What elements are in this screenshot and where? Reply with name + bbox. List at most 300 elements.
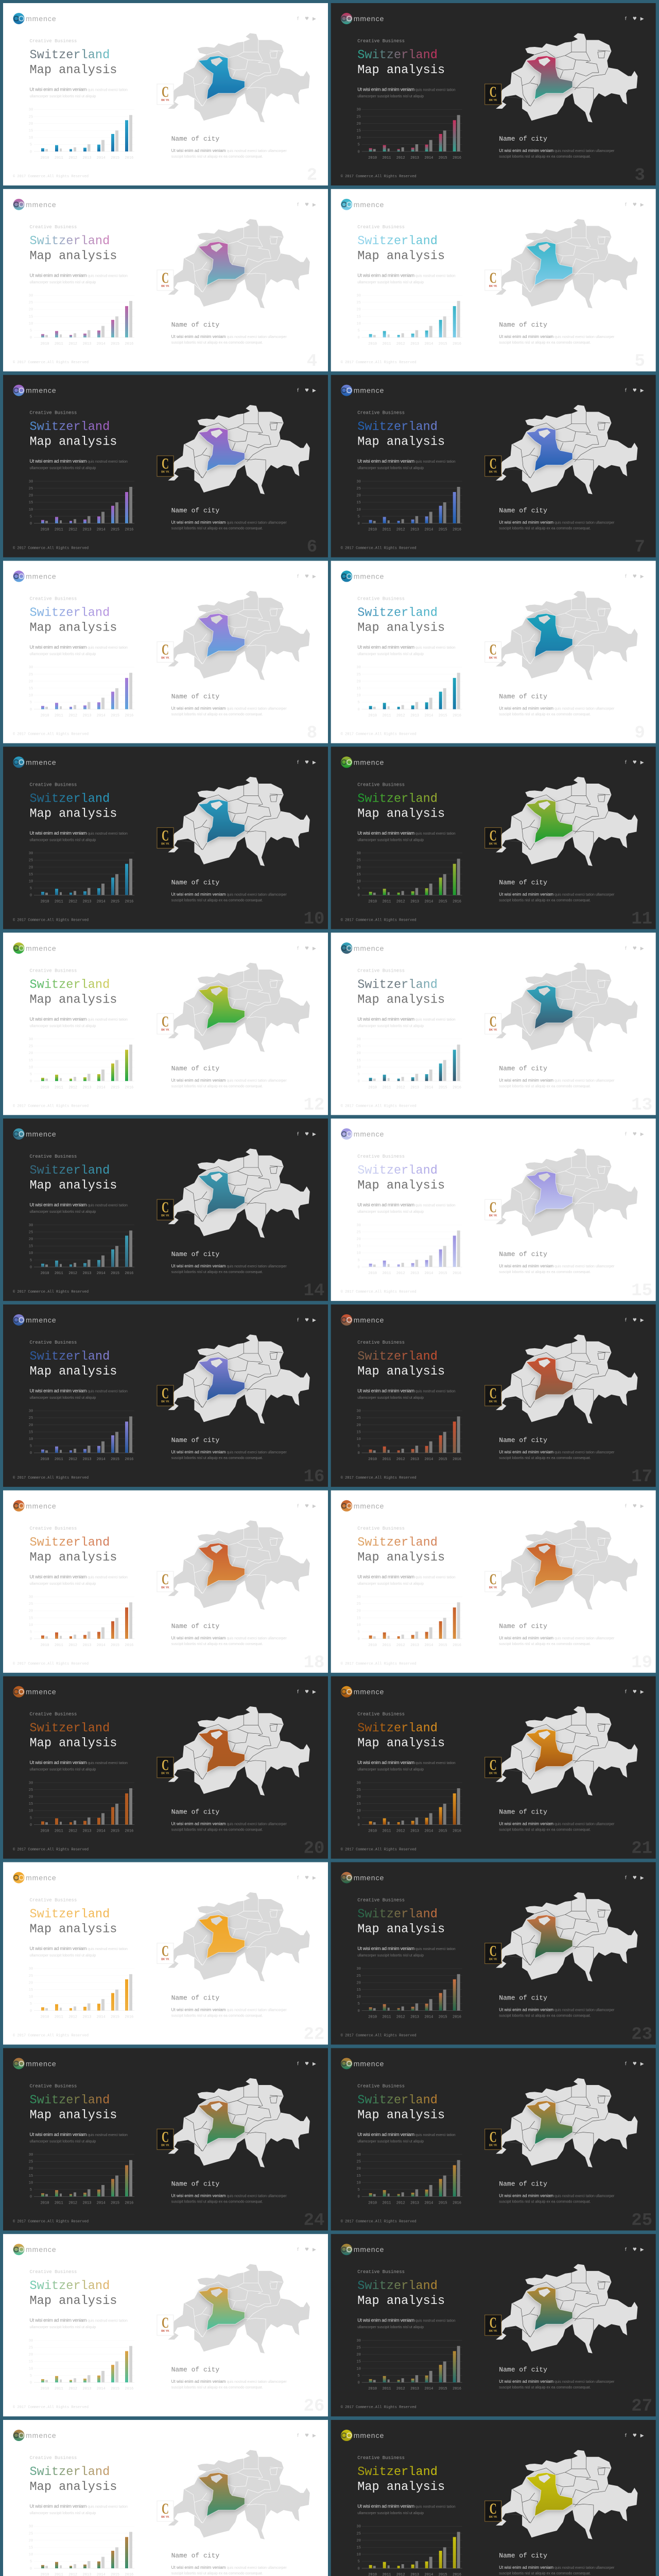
- logo: [341, 1872, 384, 1884]
- intro text: quis nostrud exerci tation: [88, 1761, 128, 1765]
- badge: BK YK: [161, 1958, 169, 1961]
- logo: [341, 199, 384, 210]
- title: Map analysis: [30, 621, 117, 635]
- bar chart: 5: [358, 329, 360, 333]
- bar chart: 20: [29, 1795, 33, 1800]
- slide 27: [331, 2234, 656, 2416]
- social icons: f♥▶: [625, 1875, 644, 1880]
- social icons: f♥▶: [297, 574, 316, 580]
- badge: [157, 455, 174, 477]
- bar chart: 20: [356, 2353, 361, 2357]
- social icons: f♥▶: [297, 1690, 316, 1695]
- bar chart: 20: [29, 1238, 33, 1242]
- footer: © 2017 Commerce.All Rights Reserved: [13, 1476, 89, 1480]
- intro text: ullamcorper suscipit lobortis nisl ut aliquip: [30, 2326, 96, 2329]
- social icons: f♥▶: [625, 16, 644, 22]
- social icons: f♥▶: [297, 2247, 316, 2252]
- page number: 24: [304, 2211, 324, 2230]
- intro text: quis nostrud exerci tation: [415, 460, 456, 464]
- city text: suscipit lobortis nisl ut aliquip ex ea commodo consequat.: [171, 1456, 263, 1460]
- bar chart: 25: [356, 1045, 361, 1049]
- page number: 4: [307, 352, 317, 371]
- intro text: Ut wisi enim ad minim veniam: [357, 645, 414, 650]
- map of Switzerland: [168, 963, 310, 1052]
- city text: suscipit lobortis nisl ut aliquip ex ea commodo consequat.: [499, 899, 591, 902]
- city text: suscipit lobortis nisl ut aliquip ex ea commodo consequat.: [499, 2386, 591, 2389]
- city text: quis nostrud exerci tation ullamcorper: [227, 2194, 287, 2198]
- intro text: Ut wisi enim ad minim veniam: [357, 1016, 414, 1022]
- bar chart: [29, 1781, 134, 1834]
- bar chart: [356, 1781, 462, 1834]
- bar chart: [356, 1595, 462, 1648]
- bar chart: 25: [356, 1230, 361, 1234]
- intro text: quis nostrud exerci tation: [88, 832, 128, 836]
- footer: © 2017 Commerce.All Rights Reserved: [341, 1476, 417, 1480]
- map of Switzerland: [496, 963, 637, 1052]
- city text: quis nostrud exerci tation ullamcorper: [554, 1823, 614, 1826]
- bar chart: 5: [358, 1445, 360, 1449]
- badge: C: [490, 1013, 497, 1030]
- city text: Ut wisi enim ad minim veniam: [171, 2193, 226, 2198]
- bar chart: 0: [30, 522, 32, 526]
- bar chart: 0: [358, 2381, 360, 2385]
- bar chart: 30: [356, 1410, 361, 1414]
- title: [30, 1536, 117, 1565]
- bar chart: 15: [29, 2360, 33, 2364]
- badge: BK YK: [489, 471, 497, 474]
- slide 11: [331, 747, 656, 929]
- map of Switzerland: [496, 2450, 637, 2539]
- slide 24: [3, 2048, 328, 2230]
- city name: Name of city: [171, 1994, 219, 2002]
- eyebrow: Creative Business: [357, 1154, 405, 1159]
- city text: suscipit lobortis nisl ut aliquip ex ea commodo consequat.: [499, 1084, 591, 1088]
- intro text: quis nostrud exerci tation: [88, 1575, 128, 1579]
- intro text: Ut wisi enim ad minim veniam: [30, 459, 86, 464]
- badge: [157, 83, 174, 105]
- slide 25: [331, 2048, 656, 2230]
- badge: BK YK: [161, 657, 169, 660]
- city text: quis nostrud exerci tation ullamcorper: [227, 1637, 287, 1640]
- intro text: ullamcorper suscipit lobortis nisl ut aliquip: [30, 2512, 96, 2515]
- bar chart: 20: [356, 494, 361, 498]
- bar chart: 30: [356, 852, 361, 856]
- slide 14: [3, 1118, 328, 1301]
- logo: [13, 2058, 57, 2069]
- city name: Name of city: [499, 135, 547, 143]
- slide 20: [3, 1676, 328, 1859]
- city text: suscipit lobortis nisl ut aliquip ex ea commodo consequat.: [499, 1456, 591, 1460]
- intro text: ullamcorper suscipit lobortis nisl ut aliquip: [357, 1954, 424, 1958]
- bar chart: 10: [356, 694, 361, 698]
- badge: C: [162, 1757, 169, 1774]
- bar chart: 20: [356, 1052, 361, 1056]
- bar chart: 10: [356, 1809, 361, 1814]
- intro text: quis nostrud exerci tation: [88, 274, 128, 278]
- bar chart: 5: [358, 2560, 360, 2564]
- title: Map analysis: [30, 2108, 117, 2122]
- intro text: quis nostrud exerci tation: [415, 1018, 456, 1022]
- title: Map analysis: [30, 63, 117, 77]
- bar chart: [356, 1224, 462, 1276]
- eyebrow: Creative Business: [357, 2269, 405, 2275]
- title: Map analysis: [357, 1737, 445, 1751]
- title: [357, 420, 445, 449]
- bar chart: 5: [358, 2188, 360, 2192]
- city text: suscipit lobortis nisl ut aliquip ex ea commodo consequat.: [499, 2014, 591, 2018]
- bar chart: 0: [358, 2195, 360, 2199]
- eyebrow: Creative Business: [30, 968, 77, 973]
- eyebrow: Creative Business: [30, 1898, 77, 1903]
- bar chart: [29, 2339, 134, 2391]
- title: Map analysis: [30, 1179, 117, 1193]
- city text: Ut wisi enim ad minim veniam: [499, 2379, 553, 2384]
- intro text: quis nostrud exerci tation: [415, 1947, 456, 1951]
- bar chart: 20: [356, 1423, 361, 1428]
- bar chart: 20: [356, 680, 361, 684]
- title: [30, 2465, 117, 2494]
- footer: © 2017 Commerce.All Rights Reserved: [341, 1104, 417, 1108]
- city text: suscipit lobortis nisl ut aliquip ex ea commodo consequat.: [171, 2386, 263, 2389]
- bar chart: 2010 2011 2012 2013 2014 2015 2016: [41, 156, 133, 160]
- bar chart: 30: [356, 1224, 361, 1228]
- city text: Ut wisi enim ad minim veniam: [499, 1636, 553, 1640]
- footer: © 2017 Commerce.All Rights Reserved: [13, 2405, 89, 2410]
- title: Map analysis: [30, 807, 117, 821]
- badge: C: [490, 1571, 497, 1588]
- logo: [341, 2058, 384, 2069]
- intro text: ullamcorper suscipit lobortis nisl ut aliquip: [357, 838, 424, 842]
- city text: Ut wisi enim ad minim veniam: [171, 1450, 226, 1454]
- map of Switzerland: [496, 1706, 637, 1795]
- badge: C: [162, 827, 169, 844]
- title: Map analysis: [30, 1923, 117, 1936]
- intro text: Ut wisi enim ad minim veniam: [357, 1388, 414, 1393]
- social icons: f♥▶: [625, 2061, 644, 2066]
- bar chart: 20: [356, 1609, 361, 1614]
- intro text: Ut wisi enim ad minim veniam: [357, 831, 414, 836]
- logo: [341, 571, 384, 582]
- social icons: f♥▶: [625, 574, 644, 580]
- bar chart: 30: [29, 1038, 33, 1042]
- city text: quis nostrud exerci tation ullamcorper: [227, 1823, 287, 1826]
- intro text: ullamcorper suscipit lobortis nisl ut aliquip: [30, 1954, 96, 1958]
- intro text: quis nostrud exerci tation: [415, 646, 456, 650]
- city name: Name of city: [499, 2180, 547, 2188]
- bar chart: 0: [30, 150, 32, 154]
- bar chart: 20: [29, 866, 33, 870]
- bar chart: 30: [29, 480, 33, 484]
- intro text: quis nostrud exerci tation: [88, 2133, 128, 2137]
- title: Map analysis: [30, 993, 117, 1007]
- badge: BK YK: [161, 1400, 169, 1403]
- bar chart: [356, 2339, 462, 2391]
- eyebrow: Creative Business: [30, 2269, 77, 2275]
- bar chart: 2010 2011 2012 2013 2014 2015 2016: [368, 714, 461, 718]
- bar chart: 15: [356, 1802, 361, 1806]
- city text: quis nostrud exerci tation ullamcorper: [554, 2380, 614, 2384]
- badge: BK YK: [489, 2144, 497, 2147]
- bar chart: 10: [356, 1437, 361, 1442]
- logo: [13, 1872, 57, 1884]
- bar chart: 5: [30, 2374, 32, 2378]
- bar chart: 25: [29, 487, 33, 491]
- bar chart: 30: [29, 852, 33, 856]
- intro text: ullamcorper suscipit lobortis nisl ut aliquip: [30, 838, 96, 842]
- eyebrow: Creative Business: [30, 2083, 77, 2089]
- city text: quis nostrud exerci tation ullamcorper: [227, 521, 287, 525]
- footer: © 2017 Commerce.All Rights Reserved: [341, 1662, 417, 1666]
- social icons: f♥▶: [297, 388, 316, 394]
- logo: mmence: [354, 200, 384, 209]
- badge: C: [162, 1942, 169, 1960]
- bar chart: 5: [358, 143, 360, 147]
- bar chart: 25: [29, 115, 33, 119]
- logo: mmence: [26, 1502, 57, 1510]
- bar chart: 25: [356, 301, 361, 305]
- city text: suscipit lobortis nisl ut aliquip ex ea commodo consequat.: [171, 2014, 263, 2018]
- city text: suscipit lobortis nisl ut aliquip ex ea commodo consequat.: [499, 341, 591, 345]
- logo: [13, 13, 57, 24]
- bar chart: 2010 2011 2012 2013 2014 2015 2016: [368, 2201, 461, 2205]
- title: [30, 420, 117, 449]
- intro text: ullamcorper suscipit lobortis nisl ut aliquip: [30, 95, 96, 98]
- badge: C: [162, 2314, 169, 2331]
- badge: C: [162, 1013, 169, 1030]
- bar chart: 15: [356, 1245, 361, 1249]
- city name: Name of city: [499, 1808, 547, 1816]
- intro text: ullamcorper suscipit lobortis nisl ut aliquip: [30, 1396, 96, 1400]
- eyebrow: Creative Business: [30, 597, 77, 602]
- bar chart: 25: [356, 2346, 361, 2350]
- city text: quis nostrud exerci tation ullamcorper: [554, 521, 614, 525]
- city name: Name of city: [499, 1436, 547, 1444]
- intro text: ullamcorper suscipit lobortis nisl ut aliquip: [30, 653, 96, 656]
- page number: 8: [307, 724, 317, 743]
- bar chart: 5: [30, 1445, 32, 1449]
- city text: Ut wisi enim ad minim veniam: [171, 1078, 226, 1082]
- eyebrow: Creative Business: [357, 597, 405, 602]
- bar chart: 0: [30, 336, 32, 340]
- footer: © 2017 Commerce.All Rights Reserved: [13, 918, 89, 922]
- bar chart: 30: [29, 1410, 33, 1414]
- badge: BK YK: [489, 2330, 497, 2333]
- logo: mmence: [26, 1873, 57, 1882]
- title: Map analysis: [357, 993, 445, 1007]
- bar chart: 30: [29, 2339, 33, 2343]
- bar chart: 10: [356, 1065, 361, 1070]
- badge: [157, 1385, 174, 1406]
- city name: Name of city: [171, 321, 219, 329]
- bar chart: 15: [29, 1059, 33, 1063]
- title: [357, 48, 445, 77]
- city text: quis nostrud exerci tation ullamcorper: [227, 2008, 287, 2012]
- footer: © 2017 Commerce.All Rights Reserved: [13, 360, 89, 365]
- badge: [157, 2500, 174, 2521]
- map of Switzerland: [168, 1148, 310, 1238]
- city text: quis nostrud exerci tation ullamcorper: [554, 2008, 614, 2012]
- city name: Name of city: [171, 135, 219, 143]
- badge: C: [490, 1942, 497, 1960]
- slide 13: [331, 933, 656, 1115]
- bar chart: 20: [29, 2539, 33, 2543]
- bar chart: 0: [358, 1451, 360, 1455]
- bar chart: 2010 2011 2012 2013 2014 2015 2016: [368, 156, 461, 160]
- badge: [157, 1757, 174, 1778]
- bar chart: 10: [356, 1623, 361, 1628]
- badge: BK YK: [489, 1772, 497, 1775]
- city text: Ut wisi enim ad minim veniam: [499, 1822, 553, 1826]
- city text: Ut wisi enim ad minim veniam: [499, 2007, 553, 2012]
- intro text: quis nostrud exerci tation: [88, 2319, 128, 2323]
- badge: BK YK: [161, 471, 169, 474]
- page number: 11: [631, 909, 652, 929]
- bar chart: 2010 2011 2012 2013 2014 2015 2016: [41, 900, 133, 904]
- bar chart: 10: [29, 694, 33, 698]
- eyebrow: Creative Business: [357, 2455, 405, 2461]
- badge: BK YK: [489, 1586, 497, 1589]
- intro text: Ut wisi enim ad minim veniam: [357, 1760, 414, 1765]
- intro text: ullamcorper suscipit lobortis nisl ut aliquip: [357, 653, 424, 656]
- badge: BK YK: [489, 1028, 497, 1031]
- city name: Name of city: [499, 1994, 547, 2002]
- map of Switzerland: [168, 777, 310, 866]
- title: Map analysis: [30, 2294, 117, 2308]
- map of Switzerland: [168, 2078, 310, 2167]
- bar chart: 15: [356, 2174, 361, 2178]
- title: Switzerland: [30, 1350, 110, 1364]
- intro text: ullamcorper suscipit lobortis nisl ut aliquip: [357, 1210, 424, 1214]
- bar chart: [29, 1967, 134, 2020]
- bar chart: 10: [29, 1809, 33, 1814]
- city text: Ut wisi enim ad minim veniam: [499, 1450, 553, 1454]
- city name: Name of city: [499, 2552, 547, 2560]
- bar chart: 15: [356, 2546, 361, 2550]
- city text: Ut wisi enim ad minim veniam: [499, 706, 553, 711]
- bar chart: 10: [29, 1437, 33, 1442]
- map of Switzerland: [168, 2264, 310, 2353]
- badge: C: [490, 2500, 497, 2517]
- bar chart: 10: [29, 136, 33, 140]
- city text: quis nostrud exerci tation ullamcorper: [554, 149, 614, 153]
- bar chart: 15: [356, 1430, 361, 1434]
- bar chart: 5: [30, 887, 32, 891]
- city name: Name of city: [499, 2366, 547, 2374]
- intro text: ullamcorper suscipit lobortis nisl ut aliquip: [357, 1582, 424, 1586]
- bar chart: [356, 666, 462, 718]
- slide 29: [331, 2420, 656, 2576]
- footer: © 2017 Commerce.All Rights Reserved: [13, 174, 89, 179]
- intro text: Ut wisi enim ad minim veniam: [30, 831, 86, 836]
- city name: Name of city: [499, 693, 547, 701]
- slide 16: [3, 1304, 328, 1487]
- bar chart: 25: [356, 673, 361, 677]
- intro text: ullamcorper suscipit lobortis nisl ut aliquip: [30, 281, 96, 284]
- page number: 18: [304, 1653, 324, 1673]
- badge: [485, 641, 501, 663]
- slide 19: [331, 1490, 656, 1673]
- bar chart: 25: [356, 1974, 361, 1978]
- bar chart: 0: [358, 1637, 360, 1641]
- city text: quis nostrud exerci tation ullamcorper: [227, 893, 287, 896]
- city name: Name of city: [171, 2366, 219, 2374]
- city name: Name of city: [171, 1436, 219, 1444]
- badge: BK YK: [161, 2330, 169, 2333]
- title: Switzerland: [30, 792, 110, 806]
- badge: [485, 2128, 501, 2149]
- intro text: Ut wisi enim ad minim veniam: [357, 459, 414, 464]
- bar chart: 30: [29, 1596, 33, 1600]
- map of Switzerland: [496, 777, 637, 866]
- intro text: ullamcorper suscipit lobortis nisl ut aliquip: [357, 2140, 424, 2143]
- footer: © 2017 Commerce.All Rights Reserved: [341, 918, 417, 922]
- city text: suscipit lobortis nisl ut aliquip ex ea commodo consequat.: [171, 1642, 263, 1646]
- intro text: ullamcorper suscipit lobortis nisl ut aliquip: [357, 1396, 424, 1400]
- intro text: ullamcorper suscipit lobortis nisl ut aliquip: [30, 1210, 96, 1214]
- title: [357, 792, 445, 821]
- eyebrow: Creative Business: [357, 782, 405, 787]
- bar chart: [356, 1967, 462, 2020]
- title: Map analysis: [30, 2480, 117, 2494]
- bar chart: 0: [358, 2567, 360, 2571]
- logo: [13, 2430, 57, 2441]
- badge: C: [490, 2128, 497, 2145]
- title: [30, 606, 117, 635]
- bar chart: 25: [29, 2532, 33, 2536]
- bar chart: 25: [356, 2532, 361, 2536]
- title: Switzerland: [357, 234, 438, 248]
- bar chart: 0: [358, 522, 360, 526]
- intro text: quis nostrud exerci tation: [88, 1204, 128, 1208]
- social icons: f♥▶: [297, 1132, 316, 1137]
- page number: 19: [631, 1653, 652, 1673]
- title: Map analysis: [357, 2108, 445, 2122]
- title: [30, 978, 117, 1007]
- bar chart: 10: [29, 1065, 33, 1070]
- bar chart: 30: [29, 294, 33, 298]
- logo: [13, 1686, 57, 1698]
- logo: mmence: [354, 944, 384, 952]
- city text: quis nostrud exerci tation ullamcorper: [227, 707, 287, 711]
- city text: Ut wisi enim ad minim veniam: [171, 2565, 226, 2570]
- bar chart: 20: [29, 494, 33, 498]
- title: [357, 1350, 445, 1379]
- city text: suscipit lobortis nisl ut aliquip ex ea commodo consequat.: [499, 1828, 591, 1832]
- bar chart: 25: [29, 301, 33, 305]
- bar chart: 2010 2011 2012 2013 2014 2015 2016: [368, 342, 461, 346]
- social icons: f♥▶: [297, 1504, 316, 1509]
- title: Map analysis: [357, 249, 445, 263]
- logo: [13, 1128, 57, 1140]
- logo: mmence: [26, 944, 57, 952]
- title: Switzerland: [30, 2465, 110, 2479]
- city text: Ut wisi enim ad minim veniam: [171, 2379, 226, 2384]
- city text: suscipit lobortis nisl ut aliquip ex ea commodo consequat.: [499, 1270, 591, 1274]
- bar chart: 5: [358, 701, 360, 705]
- badge: [485, 2500, 501, 2521]
- title: Map analysis: [357, 1365, 445, 1379]
- city text: quis nostrud exerci tation ullamcorper: [227, 335, 287, 339]
- badge: BK YK: [161, 1028, 169, 1031]
- badge: C: [162, 269, 169, 286]
- bar chart: 15: [29, 129, 33, 133]
- intro text: quis nostrud exerci tation: [88, 1947, 128, 1951]
- city text: quis nostrud exerci tation ullamcorper: [227, 2566, 287, 2570]
- title: Switzerland: [30, 606, 110, 620]
- bar chart: 2010 2011 2012 2013 2014 2015 2016: [41, 2387, 133, 2391]
- bar chart: [356, 1410, 462, 1462]
- city text: suscipit lobortis nisl ut aliquip ex ea commodo consequat.: [499, 1642, 591, 1646]
